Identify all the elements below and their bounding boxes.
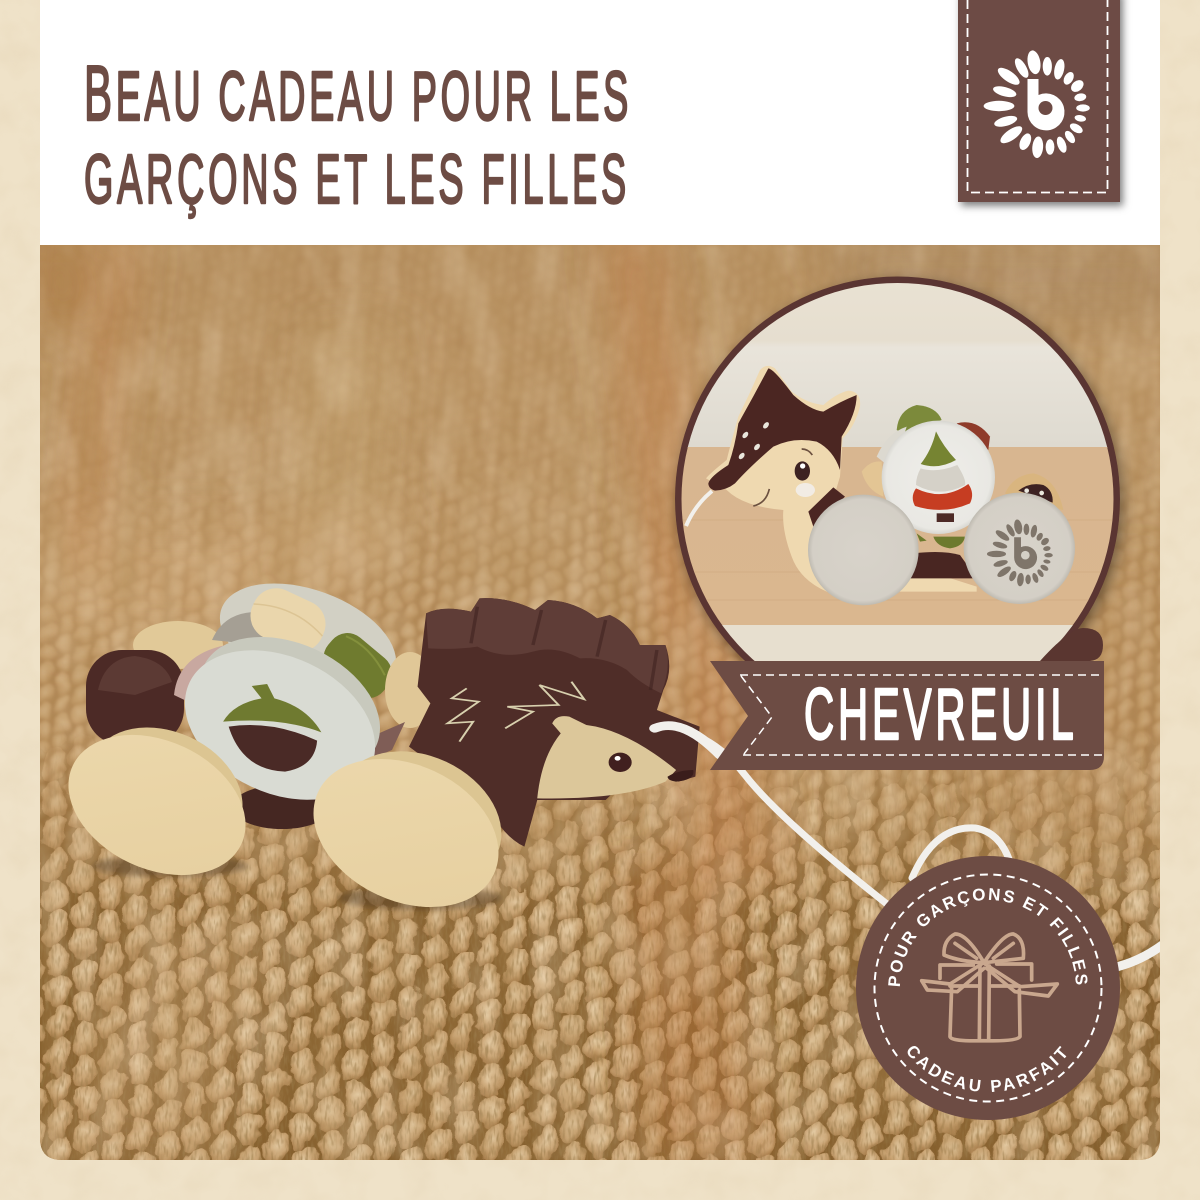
photo carpet: [722, 625, 1073, 661]
photo wooden floor: [670, 447, 1130, 627]
toy: wooden hedgehog: [46, 562, 720, 936]
badge top text: POUR GARÇONS ET FILLES: [888, 888, 1088, 986]
contact shadows: [92, 855, 502, 910]
brand tag with logo: [958, 0, 1120, 202]
icon: logo on wheel: [987, 519, 1053, 587]
ribbon text: CHEVREUIL: [804, 675, 1074, 755]
front disc with acorn: [184, 637, 380, 800]
badge: pour garçons et filles: [856, 856, 1120, 1120]
toy: wooden deer: [706, 366, 1075, 605]
title: BEAU CADEAU POUR LES: [84, 50, 628, 137]
photo: jute rug: [20, 225, 1180, 1180]
hedgehog body: [409, 598, 720, 847]
dark wooden log: [86, 650, 184, 745]
green block: [324, 633, 390, 698]
wheel right: [314, 751, 502, 907]
ribbon label: chevreuil: [710, 628, 1104, 770]
title: GARÇONS ET LES FILLES: [84, 140, 626, 218]
icon: gift box: [922, 934, 1057, 1041]
panel: chevreuil circular photo: [670, 274, 1132, 661]
title: [84, 50, 628, 218]
icon: acorn: [223, 684, 321, 772]
white header panel: [40, 0, 1160, 245]
cream block: [250, 588, 326, 648]
icon: brand logo: [984, 49, 1090, 159]
pull string: [708, 737, 1160, 971]
rear wheel and back disc: [133, 584, 396, 669]
photo wall: [688, 283, 1108, 448]
wheel left: [68, 728, 246, 876]
badge bottom text: CADEAU PARFAIT: [908, 1046, 1066, 1092]
